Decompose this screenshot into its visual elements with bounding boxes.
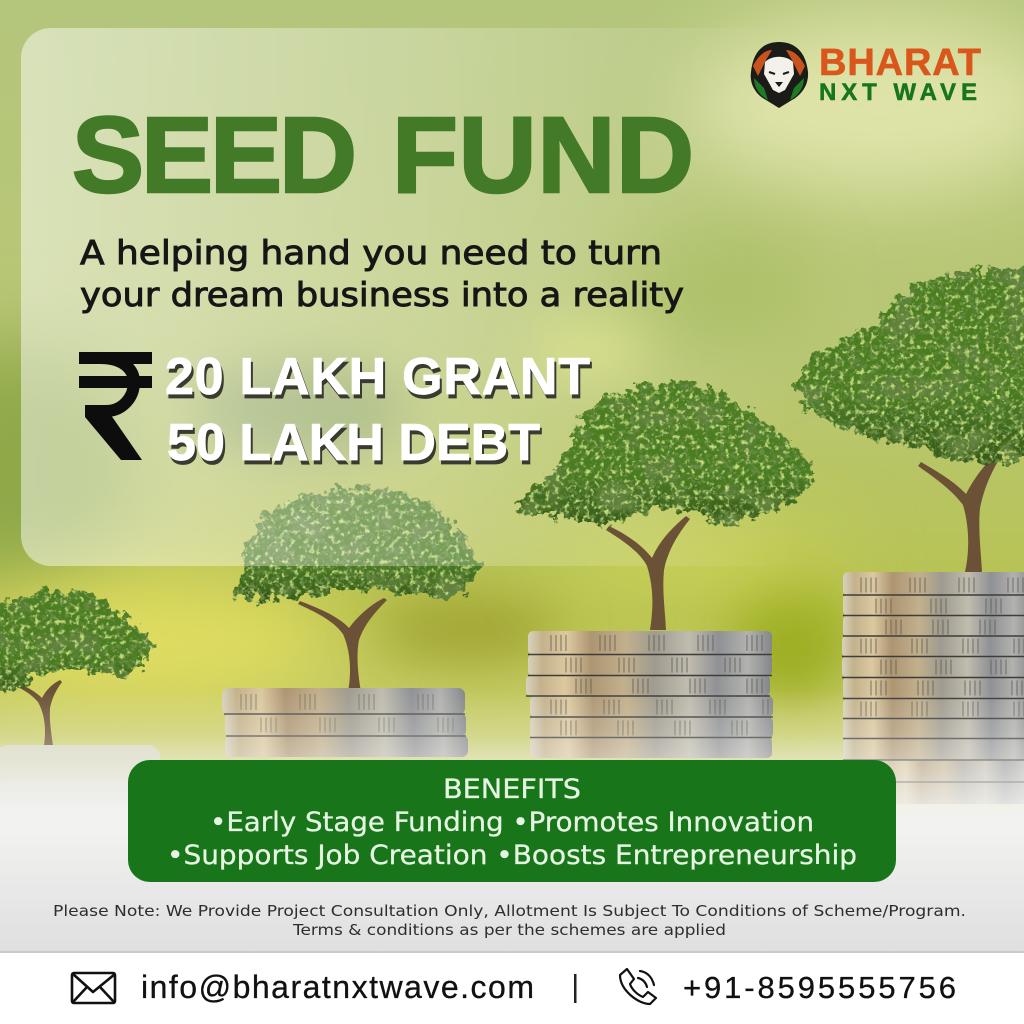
icon: rupee symbol bbox=[79, 352, 152, 460]
tree 3 bbox=[514, 383, 812, 630]
email address: info@bharatnxtwave.com bbox=[141, 969, 534, 1005]
tree 1 bbox=[0, 590, 153, 752]
grant and debt amounts bbox=[165, 348, 592, 476]
tree 2 bbox=[232, 488, 480, 692]
benefits list: •Early Stage Funding •Promotes Innovation bbox=[210, 807, 814, 838]
divider bar bbox=[574, 974, 576, 1003]
icon: phone bbox=[620, 969, 656, 1004]
logo bbox=[751, 42, 981, 108]
phone number: +91-8595555756 bbox=[683, 970, 956, 1005]
grant and debt amounts: 50 LAKH DEBT bbox=[167, 414, 540, 472]
panel: benefits bbox=[128, 760, 896, 882]
brand name: BHARAT bbox=[819, 42, 981, 84]
coin stack 2 bbox=[222, 688, 468, 757]
glass panel bbox=[21, 28, 1024, 566]
disclaimer note bbox=[53, 902, 966, 939]
coin stack 1 bbox=[0, 745, 160, 826]
tagline: A helping hand you need to turn bbox=[80, 233, 662, 272]
coin stack 3 bbox=[526, 631, 773, 758]
coin stack 4 bbox=[842, 572, 1024, 804]
grant and debt amounts: 20 LAKH GRANT bbox=[165, 348, 590, 406]
title: FUND bbox=[392, 94, 694, 215]
footer contact bar bbox=[0, 951, 1024, 1024]
tagline: your dream business into a reality bbox=[80, 275, 684, 314]
tagline bbox=[80, 233, 684, 314]
icon: envelope bbox=[72, 973, 115, 1003]
benefits list bbox=[167, 807, 857, 871]
icon: lion head bbox=[751, 42, 808, 108]
title: SEED bbox=[72, 94, 357, 215]
disclaimer note: Terms & conditions as per the schemes are applied bbox=[292, 921, 726, 939]
title bbox=[72, 94, 694, 215]
tree 4 bbox=[796, 267, 1024, 572]
disclaimer note: Please Note: We Provide Project Consultation Only, Allotment Is Subject To Conditions of Scheme/Program. bbox=[53, 902, 966, 920]
brand tagline: NXT WAVE bbox=[819, 79, 977, 106]
benefits list: •Supports Job Creation •Boosts Entrepreneurship bbox=[167, 840, 857, 871]
benefits heading: BENEFITS bbox=[443, 774, 581, 805]
grant and debt amounts: 50 LAKH DEBT bbox=[169, 418, 542, 476]
grant and debt amounts: 20 LAKH GRANT bbox=[167, 352, 592, 410]
